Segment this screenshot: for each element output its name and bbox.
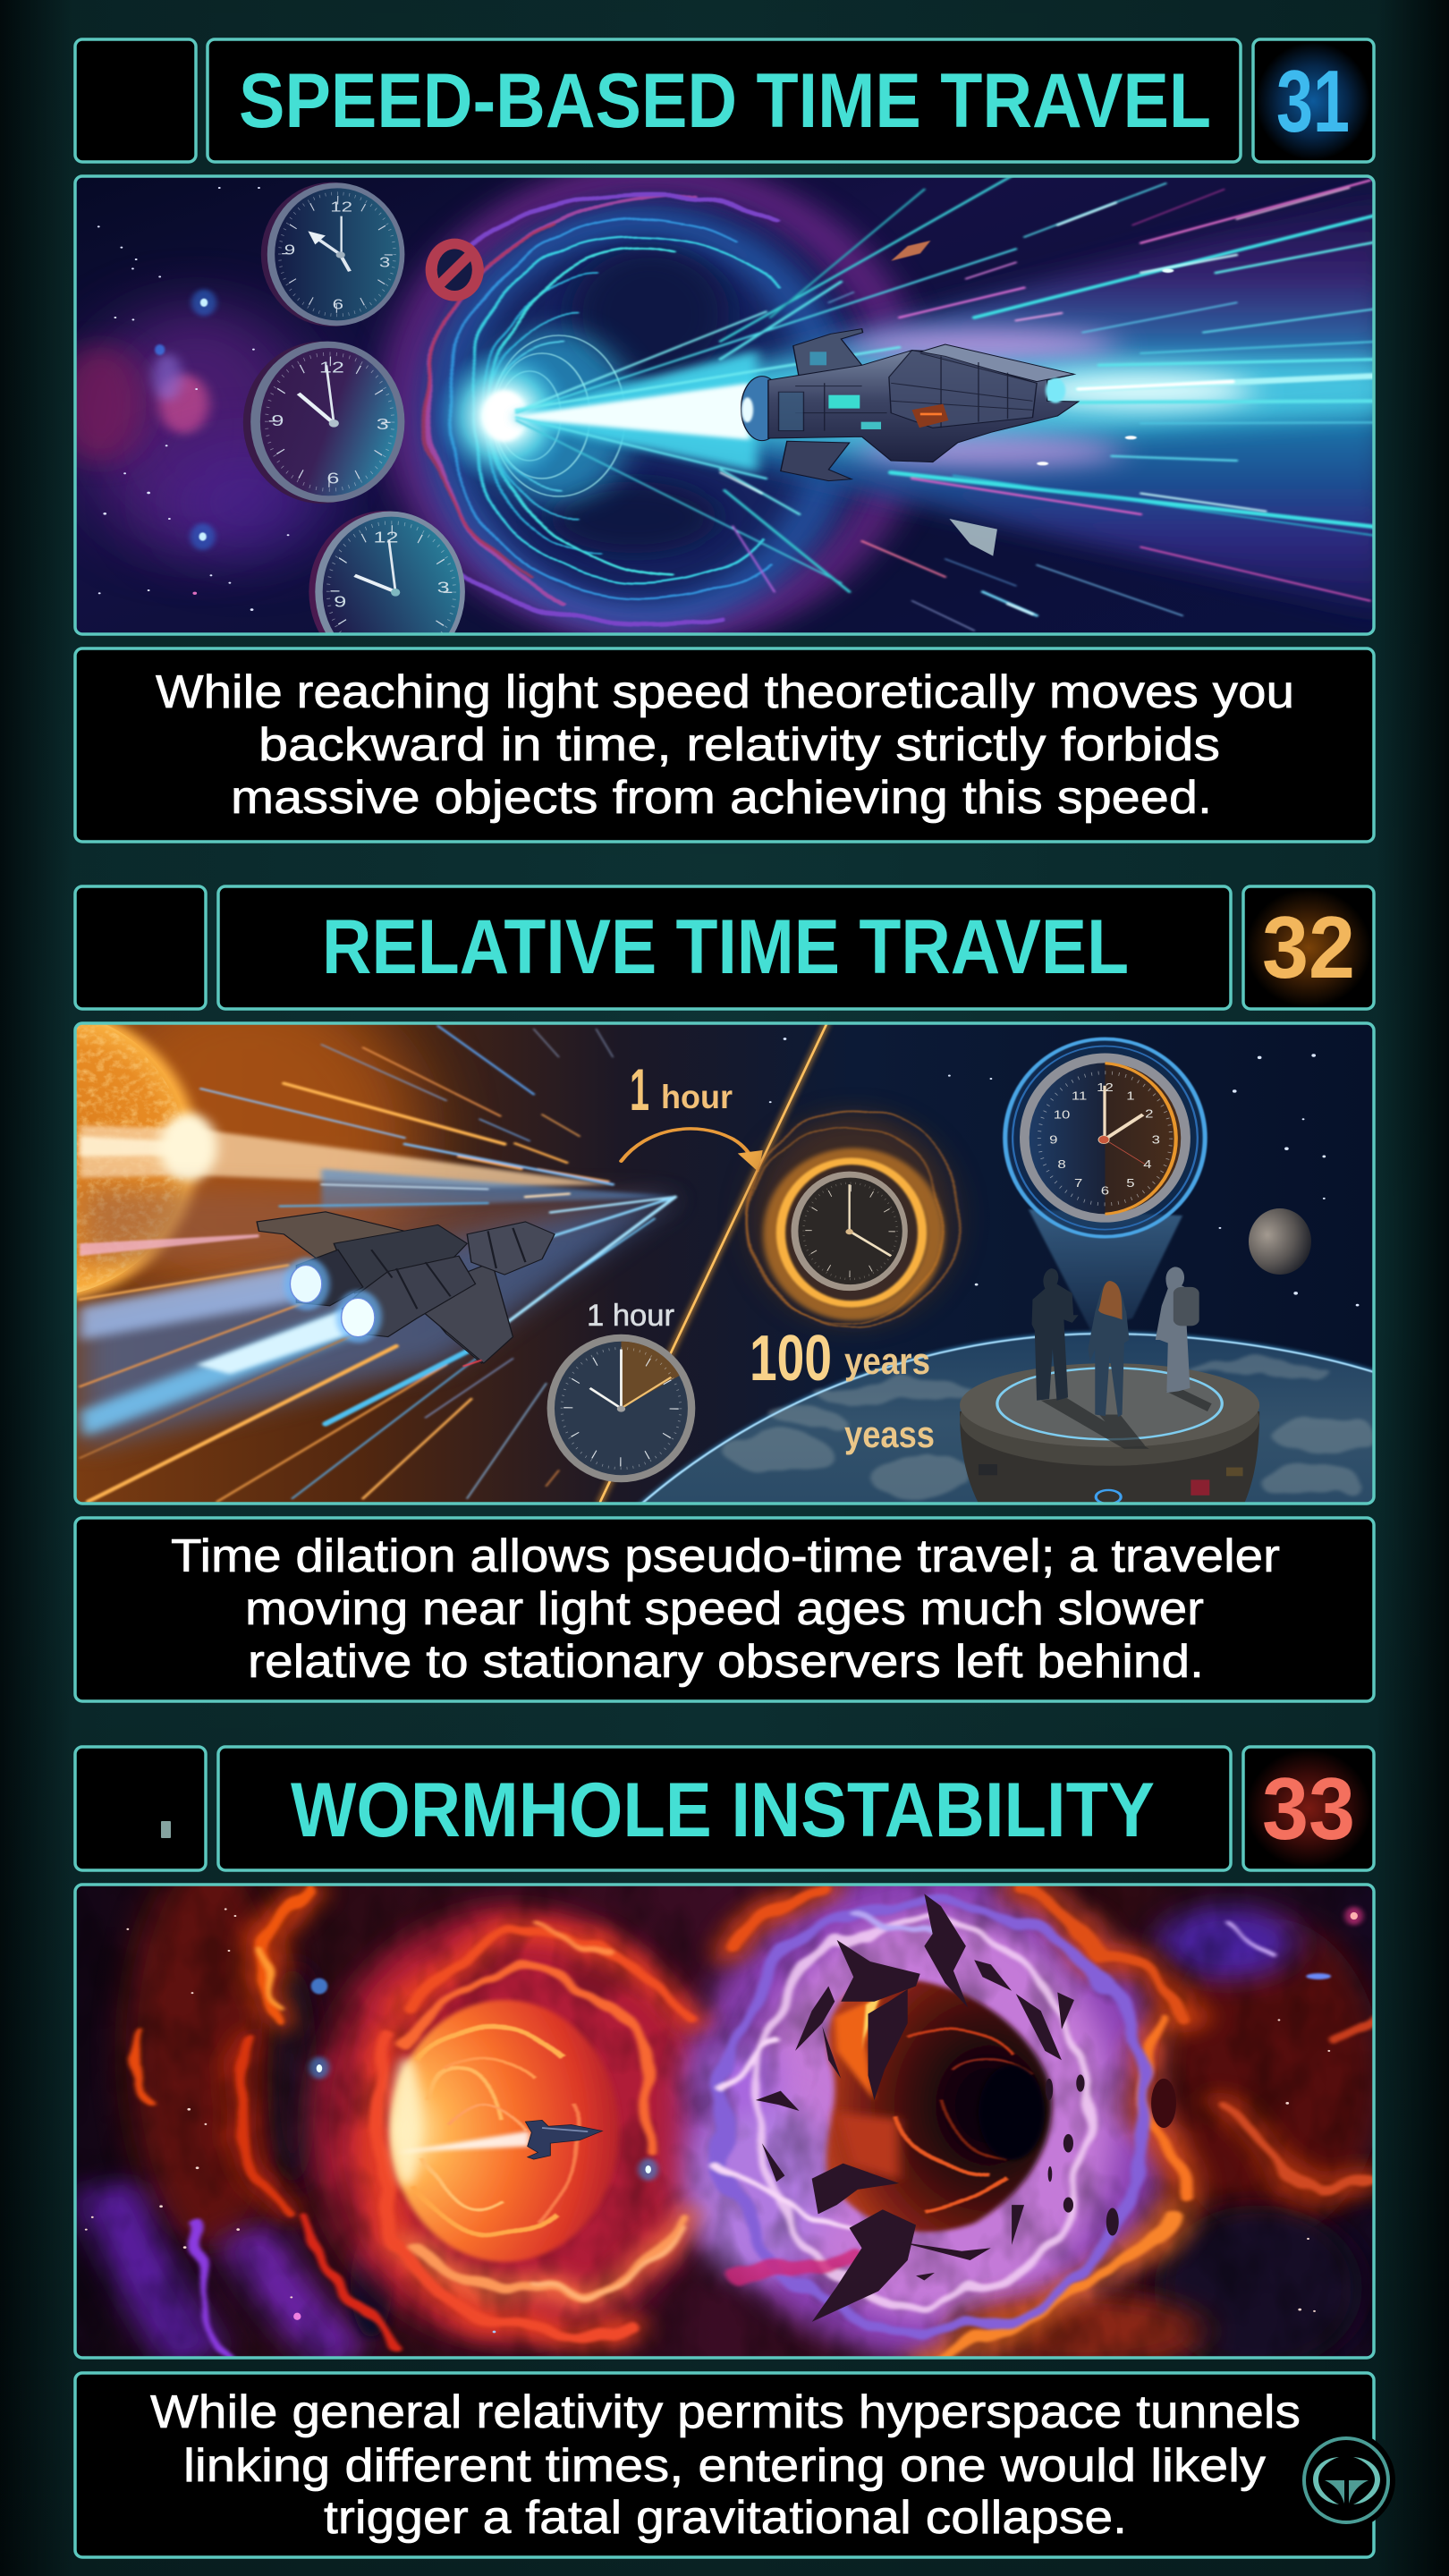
empty icon box 32 [75,886,206,1009]
hologram beam and clock: 1 [1126,1091,1135,1103]
star points [85,1907,1363,2333]
hologram beam and clock: 9 [1049,1134,1057,1147]
astronaut [1156,1267,1191,1393]
portal mouth [390,2000,619,2262]
clock middle: 3 [377,415,389,433]
clock top: 6 [333,297,343,313]
hologram beam and clock: 6 [1101,1186,1109,1198]
spaceship with engines [257,1212,555,1367]
image panel: ship leaving a wormhole with clocks [55,176,1391,673]
clock middle: 6 [326,469,339,487]
description 31: While reaching light speed theoretically moves you [156,666,1294,718]
shadows [1041,1390,1212,1449]
clock bottom [309,511,465,673]
purple energy ring [721,1903,1279,2328]
description 33: linking different times, entering one would likely [183,2440,1266,2492]
fiery swirl strokes [140,1891,1370,2359]
number badge 32: 32 [1262,898,1355,996]
labels inside illustration: 100 [750,1323,832,1394]
broad fire glow beneath the swirls [240,1891,1367,2359]
hologram beam and clock: 7 [1074,1178,1082,1190]
empty icon box 31 [75,39,196,162]
hologram beam and clock: 11 [1072,1091,1087,1103]
labels inside illustration: hour [661,1079,733,1115]
title panel 31: SPEED-BASED TIME TRAVEL [239,58,1211,144]
platform [960,1363,1259,1511]
spaceship hull [741,329,1079,481]
title panel 32 [218,886,1231,1009]
labels inside illustration: years [844,1340,930,1382]
vortex throat and debris [756,1894,1176,2322]
hologram beam and clock: 5 [1126,1178,1135,1190]
title panel 32: RELATIVE TIME TRAVEL [322,904,1129,990]
woman [1088,1281,1129,1417]
description 31: backward in time, relativity strictly forbids [258,719,1220,771]
clock top: 3 [379,254,390,270]
labels inside illustration: 1 [630,1056,649,1123]
number badge 33 [1243,1747,1374,1870]
hologram beam and clock: 4 [1143,1159,1152,1172]
description 33: While general relativity permits hyperspace tunnels [150,2386,1301,2438]
earth and atmosphere [635,1332,1380,1511]
description 33: trigger a fatal gravitational collapse. [324,2492,1127,2544]
logo badge [1297,2431,1395,2529]
labels inside illustration [587,1056,935,1455]
moon [1249,1208,1311,1275]
platform and three observers [960,1267,1259,1511]
description 32 [75,1518,1374,1701]
clock bottom: 12 [373,528,398,547]
hologram beam and clock: 2 [1145,1108,1153,1121]
clock top: 12 [330,199,352,216]
description 32: relative to stationary observers left behind. [248,1636,1204,1688]
description 33 [75,2373,1374,2557]
hologram beam and clock [1004,1038,1207,1331]
icon box 33 with small artifact [75,1747,206,1870]
clock middle: 9 [271,411,284,429]
labels inside illustration: 1 hour [587,1299,674,1333]
number badge 33: 33 [1262,1759,1355,1858]
clock middle: 12 [319,358,344,377]
title panel 33: WORMHOLE INSTABILITY [291,1767,1155,1853]
hologram beam and clock: 10 [1054,1109,1070,1122]
description 32: Time dilation allows pseudo-time travel; a traveler [171,1530,1280,1582]
nebula clouds [105,1853,1383,2371]
light-speed streak field [516,176,1391,631]
section 33: wormhole instability [72,1747,1383,2557]
number badge 32 [1243,886,1374,1009]
clock bottom: 9 [334,592,346,610]
section 31: speed-based time travel [55,39,1391,842]
clock top: 9 [284,242,295,258]
title panel 31 [208,39,1241,162]
man [1032,1268,1079,1401]
no entry sign [426,239,484,301]
clock top [261,182,404,326]
stars [769,1038,1359,1306]
small ship with trail [396,2120,603,2159]
wormhole clock [748,1110,960,1327]
clock middle [243,342,404,504]
hologram beam and clock: 12 [1097,1082,1114,1094]
clock bottom: 3 [437,578,450,596]
stars left [97,187,289,611]
distant ships and star flares [891,241,1174,556]
cloud mottling [72,1878,1375,2362]
title panel 33 [218,1747,1231,1870]
section 32: relative time travel [0,886,1380,1701]
golden time line and arc arrow [600,1024,826,1502]
number badge 31: 31 [1276,52,1350,150]
description 31 [75,648,1374,842]
sun and streak field [0,976,675,1502]
description 32: moving near light speed ages much slower [245,1583,1204,1635]
small clock: one hour [547,1335,695,1482]
background nebula and wormhole [55,177,904,633]
image panel: unstable wormhole [72,1853,1383,2371]
clocks [243,182,484,673]
labels inside illustration: yeass [844,1413,935,1455]
number badge 31 [1253,39,1374,162]
hologram beam and clock: 8 [1057,1159,1066,1172]
description 31: massive objects from achieving this speed. [231,772,1212,824]
hologram beam and clock: 3 [1152,1134,1160,1147]
image panel: time dilation [0,976,1380,1511]
